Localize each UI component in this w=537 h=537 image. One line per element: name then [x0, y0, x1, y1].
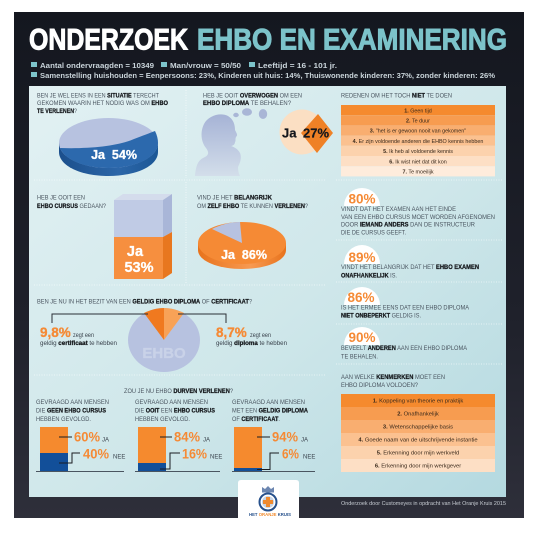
- callout: 8,7% diploma: geldig diploma te hebben: [216, 341, 287, 347]
- column: geen cursus: NEE: [113, 454, 125, 460]
- panel: cursus question: [37, 194, 172, 279]
- column: ooit cursus: HEBBEN GEVOLGD.: [135, 416, 190, 423]
- panel: geldig diploma question: [37, 298, 287, 372]
- 3D bar: Ja 53%: 53%: [124, 260, 154, 276]
- pie chart: Ja 54%: Ja 54%: [91, 148, 137, 162]
- column: ooit cursus: NEE: [210, 454, 222, 460]
- light content panel: [29, 86, 506, 497]
- stat: 80%: VINDT DAT HET EXAMEN AAN HET EINDE: [341, 206, 457, 213]
- table rows: 6. Ik wist niet dat dit kon: [389, 159, 447, 165]
- column: ooit cursus: 84%: [174, 428, 201, 444]
- table rows: 1. Geen tijd: [404, 108, 432, 114]
- title: [29, 24, 507, 56]
- table rows: 2. Onafhankelijk: [397, 412, 439, 418]
- stat: 86%: [341, 287, 470, 320]
- stat: 80%: 80%: [348, 192, 376, 206]
- survey summary: Man/vrouw = 50/50: [170, 61, 241, 70]
- icon: crown: [262, 486, 274, 492]
- stat: 80%: [341, 188, 495, 236]
- table rows: 1. Koppeling van theorie en praktijk: [373, 398, 463, 404]
- question text: EHBO CURSUS GEDAAN?: [37, 203, 106, 210]
- panel: overwogen diploma question: [195, 92, 333, 176]
- table rows: 3. Wetenschappelijke basis: [383, 424, 453, 430]
- panel: kenmerken table: [341, 374, 495, 472]
- leader lines: [52, 314, 226, 323]
- column: ooit cursus: 16%: [182, 446, 207, 462]
- column: geen cursus: [36, 399, 125, 472]
- stat: 90%: TE BEHALEN.: [341, 354, 378, 360]
- icon: cross emblem: [260, 494, 276, 510]
- pie chart: Ja 86%: Ja 86%: [221, 248, 267, 262]
- title: ONDERZOEK: [29, 24, 188, 56]
- table heading: [341, 374, 445, 389]
- question text: [37, 194, 106, 210]
- column: geldig diploma: 94%: [272, 428, 299, 444]
- question text: BEN JE WEL EENS IN EEN SITUATIE TERECHT: [37, 92, 159, 100]
- icon: thinking person: [195, 114, 241, 176]
- survey summary: Aantal ondervraagden = 10349: [40, 61, 154, 70]
- stat: 80%: VAN EEN EHBO CURSUS MOET WORDEN AFGENOMEN: [341, 214, 495, 221]
- callout: 8,7% diploma: zegt een: [250, 333, 271, 339]
- table rows: 4. Er zijn voldoende anderen die EHBO kennis hebben: [353, 139, 483, 145]
- question text: EHBO DIPLOMA TE BEHALEN?: [203, 100, 291, 107]
- callout: 9,8% certificaat: [40, 325, 117, 347]
- stat: 89%: VINDT HET BELANGRIJK DAT HET EHBO EXAMEN: [341, 264, 479, 271]
- question text: VIND JE HET BELANGRIJK: [197, 194, 272, 202]
- footer source note: Onderzoek door Customeyes in opdracht van Het Oranje Kruis 2015: [341, 501, 506, 507]
- table rows: 5. Erkenning door mijn werkveld: [377, 450, 459, 456]
- column: geldig diploma: JA: [301, 438, 308, 444]
- column: ooit cursus: [135, 399, 222, 472]
- stat: 89%: ONAFHANKELIJK IS.: [341, 272, 397, 280]
- callout: 8,7% diploma: [216, 325, 287, 347]
- column: ooit cursus: DIE OOIT EEN EHBO CURSUS: [135, 408, 215, 414]
- chart: Ja 27%: 27%: [303, 126, 329, 140]
- chart: diploma circle: [128, 308, 200, 372]
- panel: durven verlenen: [36, 388, 315, 472]
- stat: 86%: IS HET ERMEE EENS DAT EEN EHBO DIPLOMA: [341, 304, 470, 312]
- table heading: AAN WELKE KENMERKEN MOET EEN: [341, 374, 445, 381]
- column: geldig diploma: MET EEN GELDIG DIPLOMA: [232, 408, 308, 414]
- question text: BEN JE NU IN HET BEZIT VAN EEN GELDIG EHBO DIPLOMA OF CERTIFICAAT?: [37, 298, 252, 306]
- stat: 89%: 89%: [348, 250, 376, 265]
- table rows: 6. Erkenning door mijn werkgever: [375, 464, 461, 470]
- callout: 9,8% certificaat: geldig certificaat te hebben: [40, 341, 117, 347]
- stat: 90%: [341, 327, 468, 360]
- stat: 90%: 90%: [348, 330, 376, 345]
- survey summary: Samenstelling huishouden = Eenpersoons: 23%, Kinderen uit huis: 14%, Thuiswonende kinderen: 37%, zonder kinderen: 26%: [40, 71, 495, 80]
- logo: Het Oranje Kruis: HET ORANJE KRUIS: [249, 512, 292, 518]
- survey summary: Leeftijd = 16 - 101 jr.: [258, 61, 337, 70]
- column: geldig diploma: NEE: [303, 454, 315, 460]
- column: ooit cursus: GEVRAAGD AAN MENSEN: [135, 399, 208, 406]
- icon: thought bubbles: [233, 108, 267, 119]
- 3D bar: Ja 53%: Ja: [127, 244, 144, 260]
- column: geen cursus: GEVRAAGD AAN MENSEN: [36, 399, 109, 406]
- stat: 86%: 86%: [347, 290, 375, 305]
- column: geen cursus: 40%: [83, 446, 110, 462]
- chart: Ja 27%: Ja: [282, 126, 297, 140]
- stat: 80%: DOOR IEMAND ANDERS DAN DE INSTRUCTEUR: [341, 222, 475, 228]
- panel: statistics list: [341, 188, 495, 360]
- question text: TE VERLENEN?: [37, 108, 77, 115]
- section dividers: [34, 90, 502, 375]
- panel: situatie question: [37, 92, 168, 176]
- column: geen cursus: 60%: [74, 428, 101, 444]
- panel: redenen table: [341, 92, 495, 176]
- callout: 9,8% certificaat: 9,8%: [40, 325, 71, 340]
- table heading: REDENEN OM HET TOCH NIET TE DOEN: [341, 92, 452, 100]
- stat: 86%: NIET ONBEPERKT GELDIG IS.: [341, 312, 421, 320]
- callout: 9,8% certificaat: zegt een: [73, 333, 94, 339]
- stat: 90%: BEVEELT ANDEREN AAN EEN EHBO DIPLOMA: [341, 345, 468, 352]
- chart: Ja 27%: [280, 110, 333, 154]
- column: geen cursus: JA: [102, 438, 109, 444]
- question text: OM ZELF EHBO TE KUNNEN VERLENEN?: [197, 203, 308, 210]
- 3D bar: Ja 53%: [114, 194, 172, 279]
- table rows: 4. Goede naam van de uitschrijvende instantie: [358, 438, 478, 444]
- survey summary: [31, 61, 495, 80]
- question text: HEB JE OOIT EEN: [37, 194, 85, 202]
- question text: [197, 194, 308, 210]
- chart: diploma circle: EHBO: [142, 345, 186, 362]
- logo: Het Oranje Kruis: [238, 480, 299, 518]
- table rows: [341, 394, 495, 472]
- question text: GEKOMEN WAARIN HET NODIG WAS OM EHBO: [37, 100, 168, 107]
- column: ooit cursus: JA: [203, 438, 210, 444]
- table heading: EHBO DIPLOMA VOLDOEN?: [341, 382, 418, 389]
- question text: [203, 92, 302, 107]
- column: geldig diploma: 6%: [282, 446, 299, 462]
- table rows: 2. Te duur: [406, 118, 430, 124]
- column: geen cursus: HEBBEN GEVOLGD.: [36, 416, 91, 423]
- column: geldig diploma: GEVRAAGD AAN MENSEN: [232, 399, 305, 406]
- panel: zelf EHBO question: [197, 194, 308, 269]
- question text: HEB JE OOIT OVERWOGEN OM EEN: [203, 92, 302, 100]
- question text: [37, 92, 168, 115]
- column: geldig diploma: [232, 399, 315, 472]
- table rows: [341, 105, 495, 176]
- stat: 80%: DIE DE CURSUS GEEFT.: [341, 230, 406, 236]
- stat: 89%: [341, 245, 479, 280]
- section heading: ZOU JE NU EHBO DURVEN VERLENEN?: [124, 388, 233, 395]
- callout: 8,7% diploma: 8,7%: [216, 325, 247, 340]
- table rows: 5. Ik heb al voldoende kennis: [383, 149, 453, 155]
- table rows: 7. Te moeilijk: [402, 170, 434, 176]
- column: geldig diploma: OF CERTIFICAAT.: [232, 416, 280, 423]
- column: geen cursus: DIE GEEN EHBO CURSUS: [36, 408, 107, 414]
- table rows: 3. "het is er gewoon nooit van gekomen": [370, 129, 466, 135]
